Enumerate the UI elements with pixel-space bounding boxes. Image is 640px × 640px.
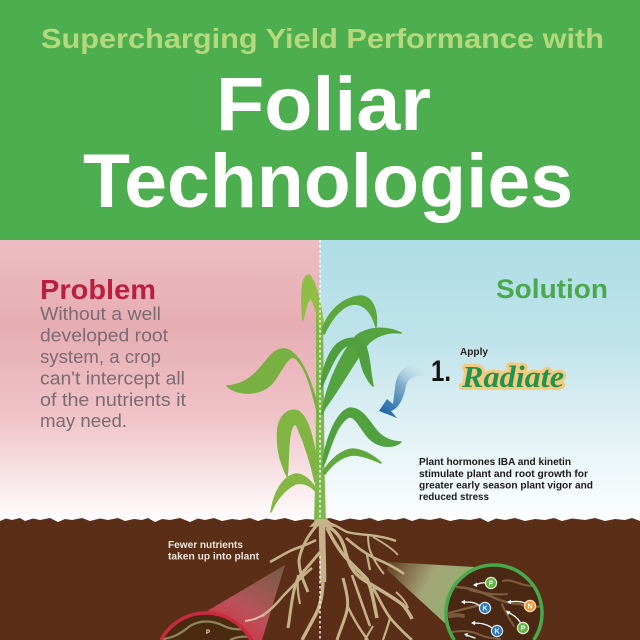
right leaf 2 <box>322 328 401 414</box>
panel: solution background <box>320 240 640 525</box>
problem description <box>40 303 186 431</box>
subtitle: Supercharging Yield Performance with <box>41 23 604 54</box>
left leaf 2 <box>277 410 317 482</box>
left leaf 1 <box>227 349 320 420</box>
nutrient badges: P <box>489 581 494 588</box>
title: Technologies <box>83 139 573 224</box>
right leaf 4 <box>323 449 381 474</box>
solution heading: Solution <box>496 274 608 304</box>
panel: solution text <box>419 274 608 503</box>
solution description: greater early season plant vigor and <box>419 480 593 492</box>
top leaf <box>302 275 323 332</box>
soil <box>0 518 640 640</box>
nutrient label P: P <box>206 630 210 636</box>
problem description: Without a well <box>40 303 161 324</box>
beam: red callout <box>207 565 285 640</box>
problem description: can't intercept all <box>40 368 185 388</box>
nutrient badges: K <box>494 629 500 636</box>
left leaf 3 <box>271 474 317 512</box>
callout text: fewer nutrients: taken up into plant <box>168 550 259 562</box>
nutrient arrows <box>464 583 525 638</box>
nutrient badges: K <box>482 606 488 613</box>
logo: Radiate: Radiate <box>461 359 564 394</box>
nutrient badges: P <box>521 626 526 633</box>
header banner <box>0 0 640 240</box>
problem heading: Problem <box>40 274 156 305</box>
nutrient arrowheads <box>461 582 511 637</box>
panel: problem text <box>40 274 186 431</box>
center divider <box>319 240 321 640</box>
root base flare <box>309 519 336 532</box>
title <box>83 62 573 224</box>
callout text: fewer nutrients <box>168 539 259 562</box>
roots <box>245 521 412 640</box>
arrow: foliar application <box>379 365 424 418</box>
beam: green callout <box>387 562 474 626</box>
problem description: of the nutrients it <box>40 389 186 410</box>
callout circle: few nutrients <box>150 613 256 640</box>
plant <box>227 275 401 522</box>
solution description: reduced stress <box>419 492 489 503</box>
stem <box>314 287 326 522</box>
callout text: fewer nutrients: Fewer nutrients <box>168 539 243 551</box>
title: Foliar <box>216 62 431 147</box>
problem description: may need. <box>40 410 127 431</box>
step number: 1. <box>431 355 451 388</box>
solution description <box>419 457 593 503</box>
solution description: Plant hormones IBA and kinetin <box>419 457 571 468</box>
right leaf 1 <box>322 296 376 334</box>
problem description: developed root <box>40 324 168 346</box>
problem description: system, a crop <box>40 346 161 367</box>
apply label: Apply <box>460 346 488 358</box>
panel: problem background <box>0 240 320 525</box>
right leaf 3 <box>323 408 401 466</box>
right inner leaf <box>321 338 373 388</box>
callout circle: more nutrients <box>445 565 545 640</box>
nutrient badges <box>479 577 536 637</box>
solution description: stimulate plant and root growth for <box>419 469 588 480</box>
nutrient badges: N <box>527 604 533 611</box>
